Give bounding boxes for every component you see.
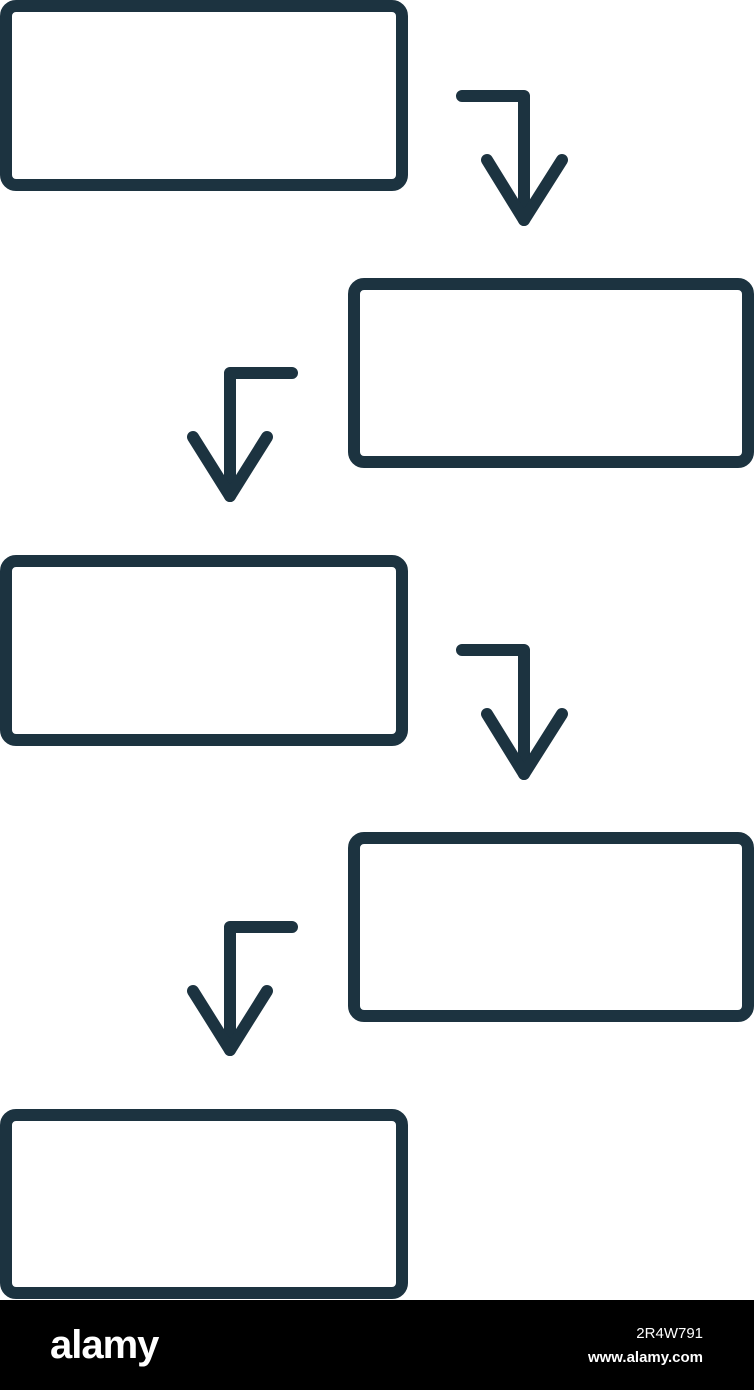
arrow 1 <box>462 96 562 220</box>
arrow 4 <box>193 927 292 1050</box>
box 5 <box>6 1115 402 1293</box>
footer bar <box>0 1300 754 1390</box>
box 1 <box>6 6 402 185</box>
box 3 <box>6 561 402 740</box>
website: www.alamy.com <box>587 1349 703 1366</box>
box 2 <box>354 284 748 462</box>
image id: 2R4W791 <box>636 1325 703 1342</box>
logo text: alamy <box>50 1323 160 1367</box>
arrow 2 <box>193 373 292 496</box>
arrow 3 <box>462 650 562 774</box>
box 4 <box>354 838 748 1016</box>
